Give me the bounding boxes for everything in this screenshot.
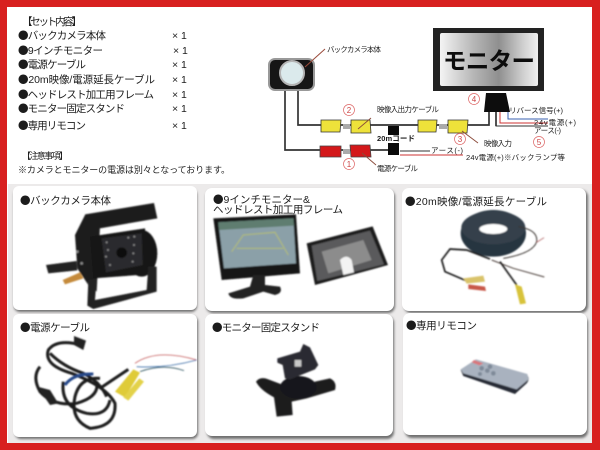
panel: remote control bbox=[403, 313, 588, 438]
labels: diagram: リバース信号(+) bbox=[509, 106, 564, 115]
icon: monitor: モニター bbox=[443, 48, 535, 74]
heading: back camera: ●バックカメラ本体 bbox=[20, 193, 112, 208]
text block: set contents: ●バックカメラ本体 bbox=[18, 28, 106, 43]
text block: set contents: × 1 bbox=[173, 45, 188, 57]
connectors: yellow bbox=[321, 120, 468, 133]
icon: back camera bbox=[269, 59, 314, 90]
icon: headrest frame photo bbox=[307, 226, 388, 285]
panel: monitor stand bbox=[205, 314, 394, 439]
labels: diagram: 映像入出力ケーブル bbox=[377, 104, 440, 114]
numbered markers: 1 bbox=[347, 160, 352, 169]
heading: 20m cable: ●20m映像/電源延長ケーブル bbox=[405, 194, 547, 209]
text block: set contents: × 1 bbox=[172, 59, 187, 71]
text block: set contents: ●専用リモコン bbox=[18, 118, 86, 133]
icon: remote photo bbox=[461, 359, 529, 394]
pointer lines bbox=[358, 118, 478, 165]
numbered markers: 3 bbox=[458, 135, 463, 144]
labels: diagram: アース(-) bbox=[431, 146, 464, 155]
text block: set contents: ●20m映像/電源延長ケーブル bbox=[18, 72, 155, 87]
text block: set contents: × 1 bbox=[172, 120, 187, 132]
text block: notes bbox=[18, 150, 230, 175]
heading: monitor and frame: ●9インチモニター& bbox=[213, 192, 310, 207]
labels: diagram: 電源ケーブル bbox=[377, 163, 418, 173]
numbered markers: 2 bbox=[347, 106, 352, 115]
labels: diagram bbox=[377, 104, 576, 173]
labels: diagram: 24v電源(+) bbox=[534, 118, 576, 127]
icon: camera photo bbox=[46, 203, 157, 309]
icon: monitor connector bbox=[484, 93, 510, 112]
20m cord block bbox=[377, 126, 415, 155]
wires bbox=[285, 90, 496, 150]
icon: monitor bbox=[433, 28, 544, 91]
panel: 9-inch monitor and frame bbox=[205, 188, 395, 313]
icon: power cable photo bbox=[36, 336, 197, 428]
connectors: red bbox=[320, 145, 371, 157]
text block: notes: 【注意事項】 bbox=[22, 150, 68, 161]
connector gaps bbox=[343, 124, 447, 154]
numbered markers bbox=[344, 94, 544, 170]
labels: diagram: 24v電源(+)※バックランプ等 bbox=[466, 152, 566, 162]
text block: set contents: × 1 bbox=[172, 89, 187, 101]
icon: stand photo bbox=[256, 344, 336, 417]
text block: notes: ※カメラとモニターの電源は別々となっております。 bbox=[18, 165, 230, 175]
text block: set contents: × 1 bbox=[172, 74, 187, 86]
labels: diagram: アース(-) bbox=[534, 126, 562, 135]
text block: set contents bbox=[18, 15, 188, 133]
panel: 20m cable bbox=[402, 188, 588, 313]
heading: remote control: ●専用リモコン bbox=[406, 318, 477, 333]
labels: diagram: 映像入力 bbox=[484, 138, 512, 148]
text block: set contents: ●電源ケーブル bbox=[18, 57, 86, 72]
20m cord block: 20mコード bbox=[377, 134, 415, 143]
text block: set contents: ●9インチモニター bbox=[18, 43, 103, 58]
label: back camera: バックカメラ本体 bbox=[327, 44, 382, 54]
text block: set contents: ●ヘッドレスト加工用フレーム bbox=[18, 87, 154, 102]
text block: set contents: × 1 bbox=[172, 30, 187, 42]
text block: set contents: ●モニター固定スタンド bbox=[18, 101, 125, 116]
icon: cable coil photo bbox=[442, 210, 544, 304]
heading: monitor stand: ●モニター固定スタンド bbox=[212, 320, 320, 335]
text block: set contents: × 1 bbox=[172, 103, 187, 115]
heading: set contents: 【セット内容】 bbox=[22, 15, 82, 28]
numbered markers: 5 bbox=[537, 138, 542, 147]
panel: power cable bbox=[13, 314, 198, 439]
heading: power cable: ●電源ケーブル bbox=[20, 320, 90, 335]
label: back camera bbox=[305, 44, 382, 67]
wiring diagram bbox=[269, 28, 576, 173]
heading: monitor and frame: ヘッドレスト加工用フレーム bbox=[213, 204, 343, 216]
numbered markers: 4 bbox=[472, 95, 477, 104]
panel: back camera bbox=[13, 186, 197, 312]
icon: monitor photo bbox=[213, 214, 300, 299]
